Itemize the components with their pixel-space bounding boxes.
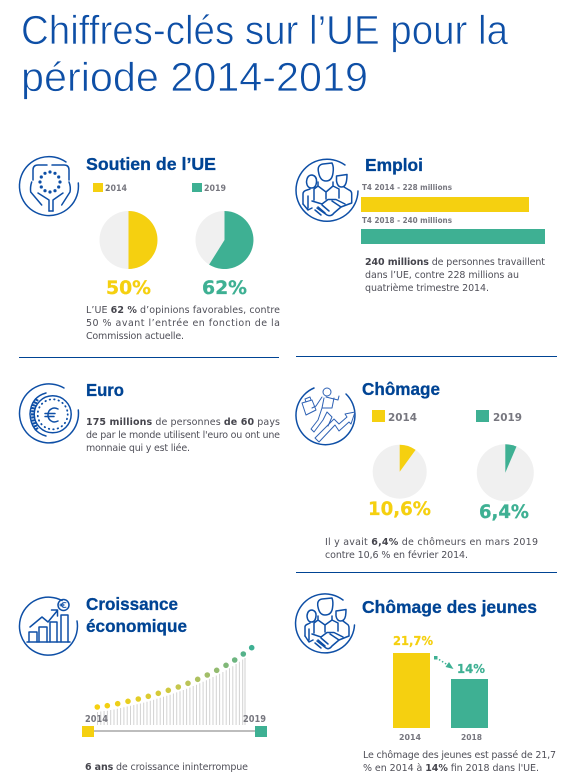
text block: de par le monde utilisent l'euro ou ont une [86,430,280,441]
legend 2014: 2014 [388,411,417,424]
text block [325,537,538,561]
bar 2018 [451,679,488,728]
heading: Chômage des jeunes [362,597,537,617]
text block [365,257,545,294]
text block: L’UE 62 % d’opinions favorables, contre [86,305,280,316]
legend 2019: 2019 [204,184,226,194]
value 62%: 62% [202,277,247,299]
icon: euro coin [19,384,78,443]
title [21,7,508,100]
text block [86,305,280,342]
heading: économique [86,616,187,636]
pie chart 2014 [100,211,158,269]
legend 2014 [93,183,127,194]
legend 2019 [476,410,522,424]
icon: people shaking hands [296,594,354,653]
text block [363,750,556,774]
panel: Chômage des jeunes [296,594,556,774]
text block [86,417,280,454]
area chart: growth bars [98,658,245,725]
value 50%: 50% [106,277,151,299]
pie chart 2019 [477,444,534,501]
bar label 2018: T4 2018 - 240 millions [362,216,452,225]
arrow: decrease [434,656,454,669]
heading: Soutien de l’UE [86,154,216,174]
panel: Euro [19,380,280,454]
icon: people shaking hands [296,159,358,221]
heading: Euro [86,380,124,400]
legend 2019: 2019 [493,411,522,424]
bar 2014 [361,197,529,212]
text block: monnaie qui y est liée. [86,443,190,454]
label 2019: 2019 [243,714,266,725]
text block: dans l’UE, contre 228 millions au [365,270,519,281]
icon: person running up a growth arrow [296,388,355,445]
timeline axis [82,726,267,737]
text block: 6 ans de croissance ininterrompue [85,762,248,773]
text block: 240 millions de personnes travaillent [365,257,545,268]
text block: % en 2014 à 14% fin 2018 dans l'UE. [363,763,539,774]
text block: 175 millions de personnes de 60 pays [86,417,280,428]
text block: Le chômage des jeunes est passé de 21,7 [363,750,556,761]
text block: 50 % avant l’entrée en fonction de la [86,318,280,329]
heading: Chômage [362,379,440,399]
value 21,7%: 21,7% [393,633,433,648]
legend 2019 [192,183,226,194]
title: période 2014-2019 [21,54,368,100]
legend 2014 [372,410,417,424]
label 2014: 2014 [399,733,421,742]
heading [86,594,187,636]
text block: Il y avait 6,4% de chômeurs en mars 2019 [325,537,538,548]
value 6,4%: 6,4% [479,501,529,523]
text block: Commission actuelle. [86,331,184,342]
panel: Chômage [296,379,538,561]
panel: Croissance économique [19,594,267,773]
bar 2014 [393,653,430,728]
pie chart 2014 [373,445,427,499]
heading: Emploi [365,155,423,175]
bar 2018 [361,229,545,244]
value 14%: 14% [457,661,485,676]
area chart: dots [94,645,254,710]
panel: Emploi [296,155,545,294]
label 2018: 2018 [461,733,482,742]
title: Chiffres-clés sur l’UE pour la [21,7,508,53]
bar label 2014: T4 2014 - 228 millions [362,183,452,192]
pie chart 2019 [196,211,254,269]
text block: quatrième trimestre 2014. [365,283,489,294]
panel: Soutien de l'UE [19,154,280,342]
text block: contre 10,6 % en février 2014. [325,550,468,561]
legend 2014: 2014 [105,184,127,194]
label 2014: 2014 [85,714,108,725]
value 10,6%: 10,6% [368,498,431,520]
heading: Croissance [86,594,178,614]
icon: hands holding EU stars [19,157,78,216]
icon: rising bars with euro [19,597,77,655]
